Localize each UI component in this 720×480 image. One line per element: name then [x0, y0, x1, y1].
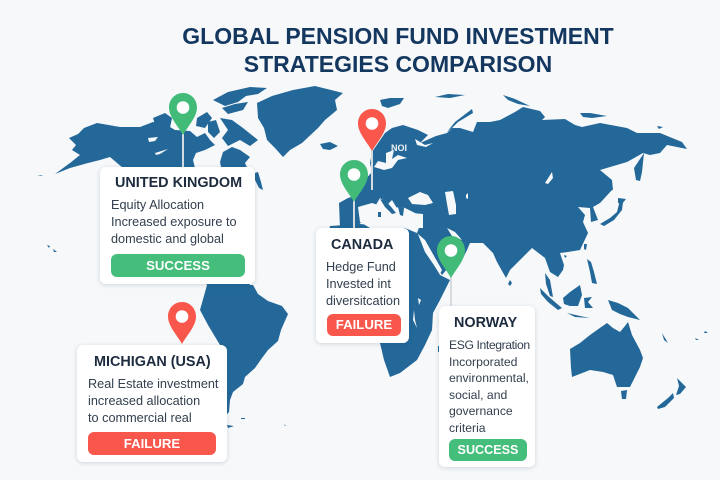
status badge: SUCCESS: [146, 258, 210, 273]
description: diversitcation: [326, 294, 400, 308]
description: Equity Allocation: [111, 198, 204, 212]
description: [449, 338, 530, 434]
description: increased allocation: [88, 394, 200, 408]
title: GLOBAL PENSION FUND INVESTMENT: [182, 23, 614, 49]
pin stem: Saudi marker: [450, 272, 452, 307]
status badge: SUCCESS: [458, 443, 518, 457]
description: domestic and global: [111, 232, 224, 246]
heading: CANADA: [331, 237, 393, 253]
description: Hedge Fund: [326, 260, 396, 274]
description: criteria: [449, 420, 486, 434]
heading: MICHIGAN (USA): [94, 354, 211, 370]
pin stem: Norway: [371, 148, 373, 190]
icon: green pin, United Kingdom: [169, 93, 197, 135]
icon: red pin, Norway: [358, 109, 386, 151]
title: STRATEGIES COMPARISON: [244, 51, 552, 77]
status badge: [449, 439, 527, 461]
panel: Canada: [316, 228, 409, 343]
status badge: [111, 254, 245, 277]
description: environmental,: [449, 371, 529, 385]
icon: green pin, Arabian Sea: [437, 236, 465, 278]
status badge: [88, 432, 216, 455]
icon: green pin, Canada: [340, 160, 368, 202]
panel: Michigan (USA): [77, 345, 227, 462]
description: [88, 377, 218, 425]
description: to commercial real: [88, 411, 192, 425]
description: Invested int: [326, 277, 391, 291]
status badge: FAILURE: [124, 436, 180, 451]
panel: United Kingdom: [100, 167, 255, 284]
description: ESG Integration: [449, 338, 530, 352]
heading: NORWAY: [454, 315, 517, 331]
description: Incorporated: [449, 354, 517, 368]
panel: Norway: [439, 306, 535, 467]
pin stem: United Kingdom: [182, 130, 184, 168]
description: social, and: [449, 388, 507, 402]
description: [326, 260, 400, 308]
description: governance: [449, 404, 513, 418]
description: Increased exposure to: [111, 215, 237, 229]
status badge: FAILURE: [336, 317, 392, 332]
description: Real Estate investment: [88, 377, 218, 391]
heading: UNITED KINGDOM: [115, 175, 242, 191]
pin stem: Canada: [353, 200, 355, 229]
title: [182, 23, 614, 77]
status badge: [327, 314, 401, 336]
icon: red pin, Michigan: [168, 302, 196, 344]
description: [111, 198, 237, 246]
map label fragment: NOI: [391, 143, 407, 153]
